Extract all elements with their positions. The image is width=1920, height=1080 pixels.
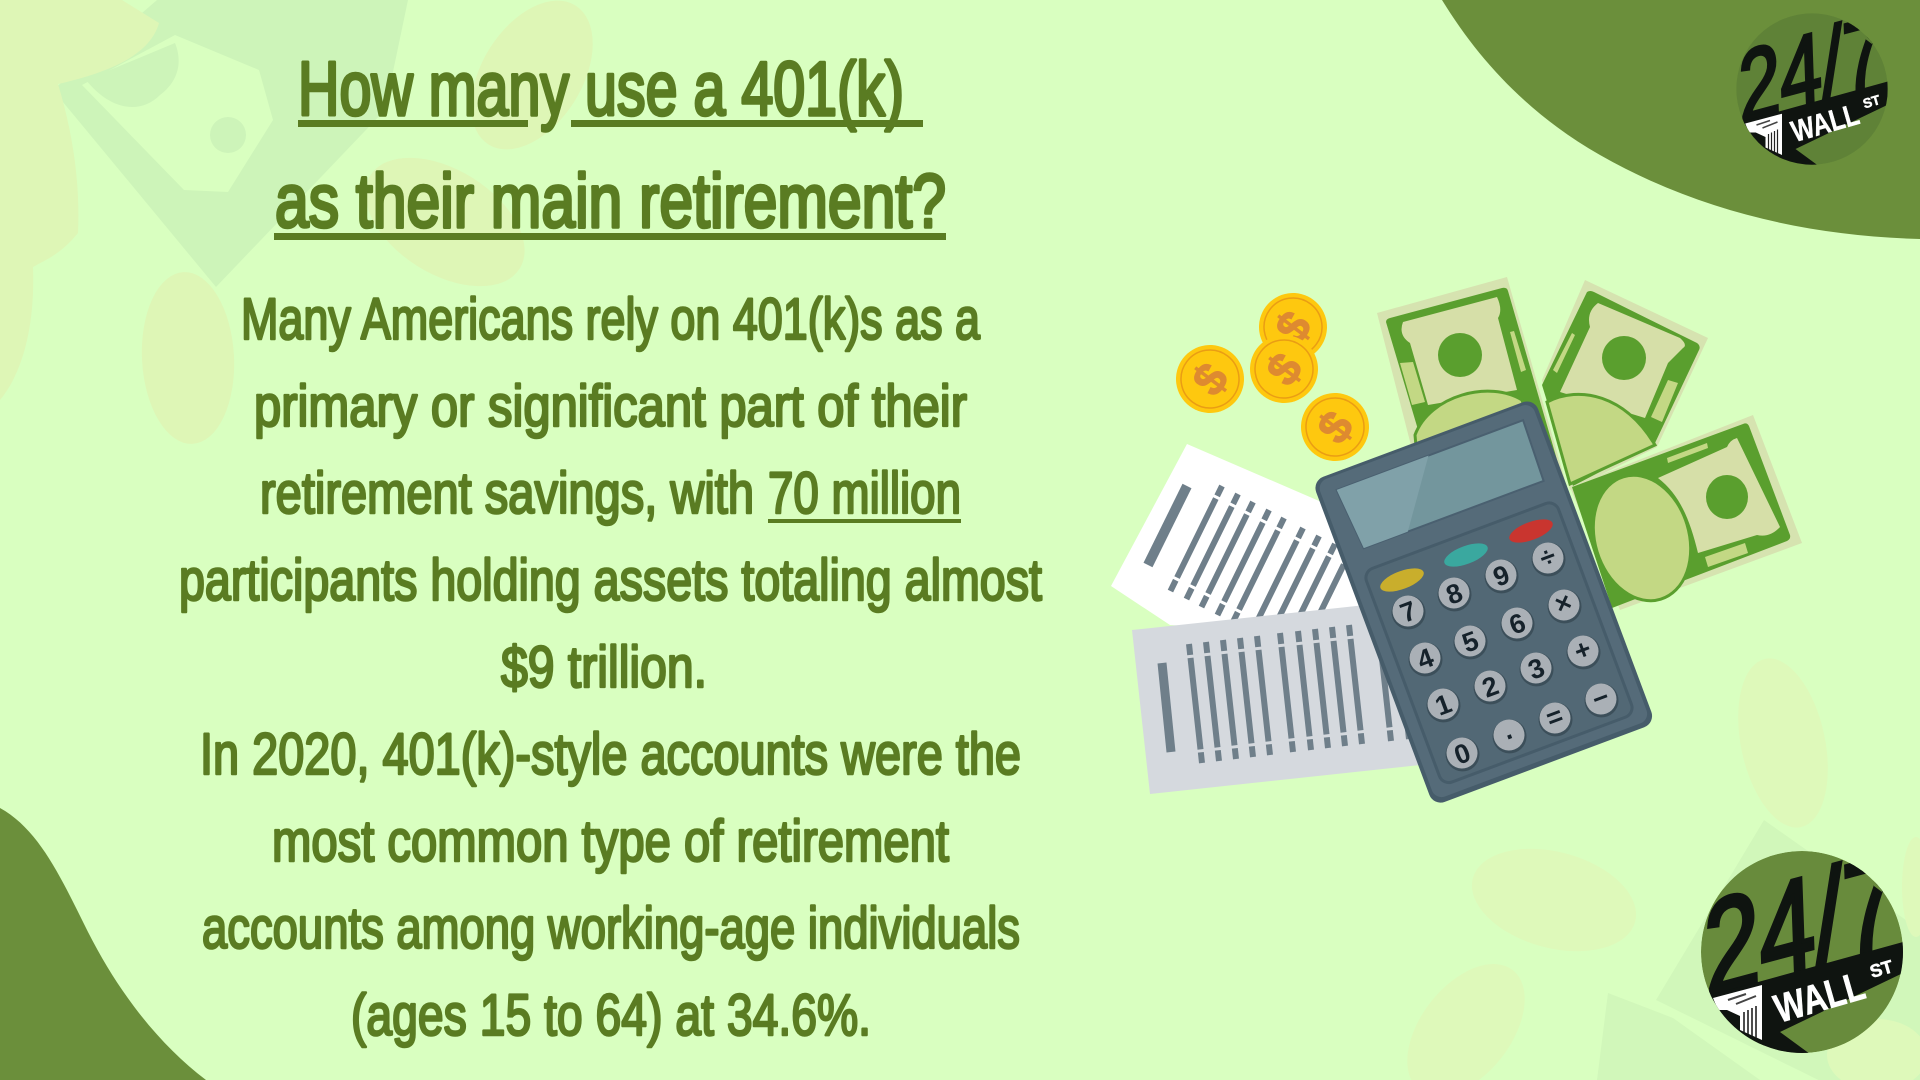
bill: bottom right — [1570, 415, 1802, 613]
calculator keys: 0 — [1450, 737, 1475, 771]
corner blob: top right — [1442, 0, 1920, 239]
calculator keys: 8 — [1442, 577, 1467, 611]
calculator keys: × — [1551, 586, 1576, 620]
calculator keys: . — [1498, 715, 1516, 746]
body text: accounts among working-age individuals — [202, 896, 1020, 961]
button: red — [1506, 515, 1556, 547]
title — [274, 47, 946, 244]
bill: right — [1542, 280, 1708, 490]
icon: calculator — [1312, 398, 1656, 806]
body text: retirement savings, with — [260, 461, 754, 526]
logo: bottom right — [1701, 851, 1903, 1053]
bill: left — [1377, 277, 1565, 500]
keypad panel — [1363, 500, 1635, 785]
calculator keys: 9 — [1489, 559, 1514, 593]
calculator screen — [1337, 420, 1545, 550]
icon: bank notes — [1377, 277, 1802, 613]
calculator body — [1312, 398, 1656, 806]
icon: grey receipt — [1132, 604, 1420, 794]
calculator keys: − — [1588, 681, 1613, 715]
calculator keys: 4 — [1413, 642, 1438, 676]
calculator keys: 6 — [1505, 607, 1530, 641]
body text: Many Americans rely on 401(k)s as a — [241, 287, 981, 352]
body text: participants holding assets totaling almost — [179, 548, 1042, 613]
logo: bottom right: ST — [1868, 956, 1895, 982]
calculator keys: 3 — [1524, 652, 1549, 686]
coin: $ — [1182, 353, 1238, 405]
coin — [1287, 379, 1383, 475]
calculator keys: 7 — [1396, 595, 1421, 629]
body text: primary or significant part of their — [254, 374, 967, 439]
calculator keys: 5 — [1458, 625, 1483, 659]
calculator keys: 1 — [1431, 688, 1456, 722]
coin: $ — [1256, 343, 1312, 395]
logo: top right: ST — [1861, 92, 1883, 111]
title: as their main retirement? — [275, 159, 946, 244]
calculator keys: ÷ — [1535, 540, 1560, 574]
body text: most common type of retirement — [272, 809, 949, 874]
coin — [1245, 279, 1341, 375]
calculator keys: = — [1542, 700, 1567, 734]
body text: In 2020, 401(k)-style accounts were the — [200, 722, 1021, 787]
coin — [1236, 321, 1332, 417]
calculator keys — [1387, 537, 1623, 776]
title: How many use a 401(k) — [298, 47, 904, 132]
button: yellow — [1377, 564, 1427, 596]
logo: bottom right: WALL — [1769, 964, 1870, 1032]
button: teal — [1441, 539, 1491, 571]
icon: gold coins — [1162, 279, 1383, 475]
calculator keys: 2 — [1478, 670, 1503, 704]
body text: 70 million — [768, 461, 961, 526]
coin: $ — [1265, 301, 1321, 353]
body text: (ages 15 to 64) at 34.6%. — [351, 983, 871, 1048]
coin: $ — [1307, 401, 1363, 453]
coin — [1162, 331, 1258, 427]
corner blob: bottom left — [0, 808, 206, 1080]
logo: top right: WALL — [1788, 98, 1863, 149]
calculator keys: + — [1570, 633, 1595, 667]
body text: $9 trillion. — [501, 635, 707, 700]
body text — [179, 287, 1042, 1048]
icon: white receipt — [1111, 444, 1420, 662]
